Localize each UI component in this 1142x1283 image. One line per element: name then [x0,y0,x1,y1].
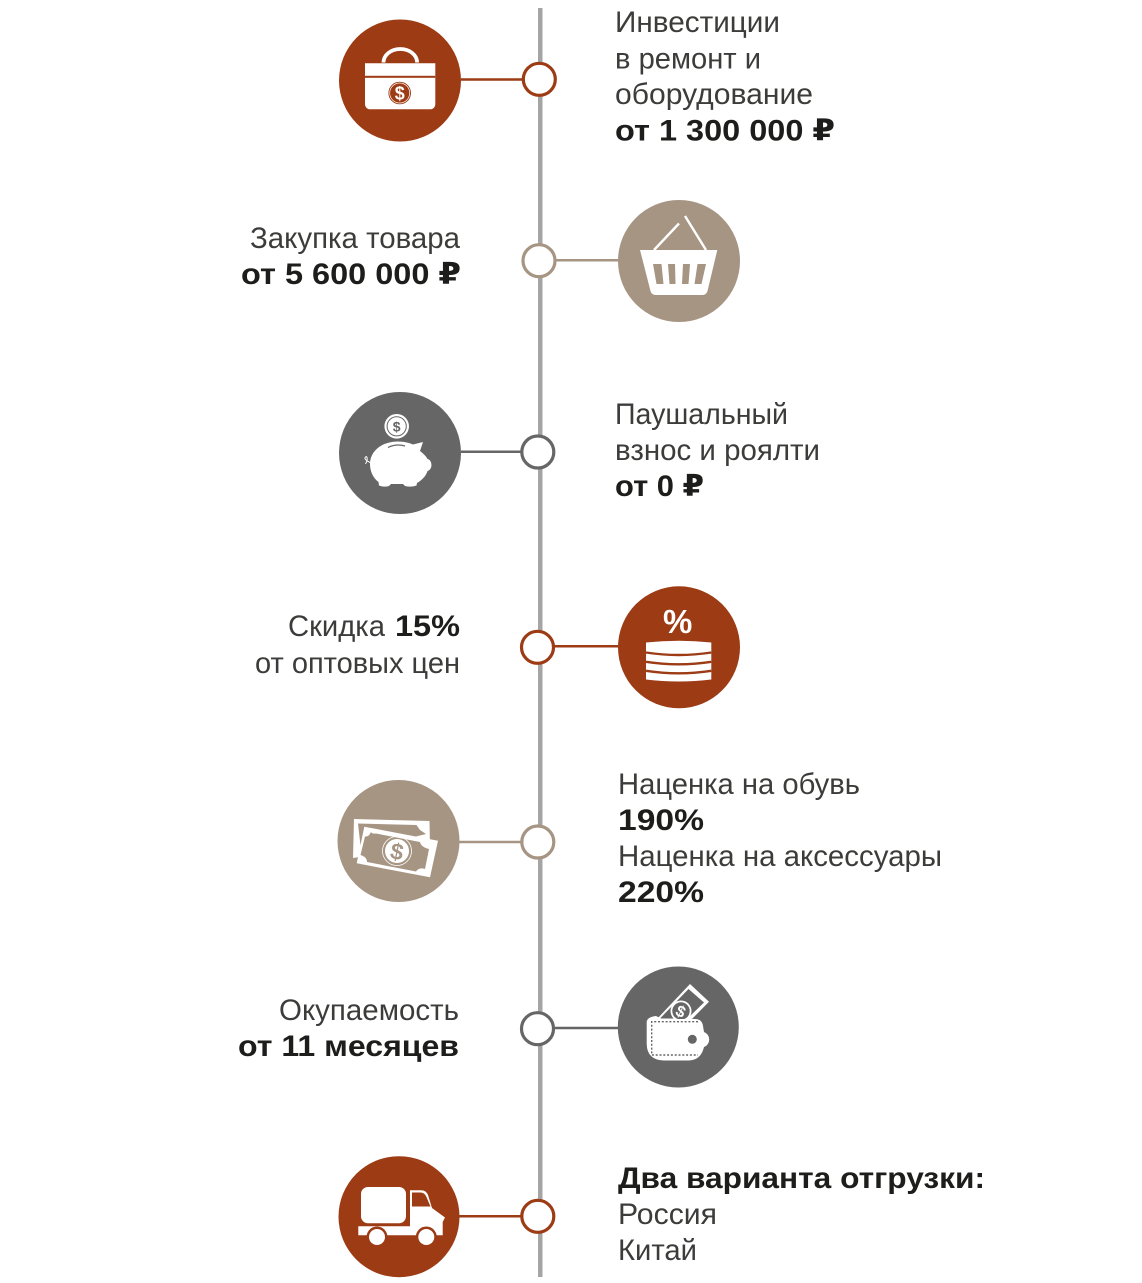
text: wholesale discount: от оптовых цен [255,647,460,680]
text: markup: Наценка на аксессуары [618,840,942,873]
connector and node 2 [523,245,618,277]
vertical timeline axis [538,8,542,1277]
text: shipping options: Два варианта отгрузки: [618,1162,985,1195]
text: shipping options: Китай [618,1234,697,1267]
step 6: payback [238,966,739,1088]
text: markup: 190% [618,804,704,837]
text: payback: Окупаемость [279,994,459,1027]
text: franchise fee and royalty [615,398,820,503]
step 3: franchise fee and royalty [339,392,820,514]
text: franchise fee and royalty: от 0 ₽ [615,470,704,503]
icon: wallet with banknote [618,966,739,1088]
icon: toolcase with dollar: $ [395,84,405,104]
icon: piggy bank with coin: $ [393,418,401,434]
connector and node 1 [461,63,555,95]
icon: toolcase with dollar [339,20,461,142]
text: franchise fee and royalty: Паушальный [615,398,788,431]
step 4: wholesale discount [255,586,740,708]
text: payback: от 11 месяцев [238,1030,459,1063]
text: franchise fee and royalty: взнос и роялти [615,434,820,467]
icon: delivery truck [338,1156,460,1277]
connector and node 5 [459,826,554,858]
text: payback [238,994,459,1063]
text: renovation and equipment [615,6,835,148]
text: renovation and equipment: оборудование [615,78,813,111]
text: wholesale discount: 15% [395,610,460,643]
text: wholesale discount: Скидка [288,610,385,643]
step 5: markup [338,768,942,909]
text: wholesale discount [255,610,460,680]
icon: banknotes: $ [388,838,406,866]
text: shipping options [618,1162,985,1267]
icon: wallet with banknote: $ [673,1003,688,1022]
text: markup: 220% [618,876,704,909]
connector and node 3 [461,436,554,468]
connector and node 6 [522,1013,618,1045]
text: goods purchase: Закупка товара [250,222,460,255]
step 1: renovation and equipment [339,6,835,148]
connector and node 4 [522,631,618,663]
text: goods purchase: от 5 600 000 ₽ [241,258,461,291]
icon: shopping basket [618,200,740,322]
icon: banknotes [338,780,460,902]
connector and node 7 [459,1200,554,1232]
text: markup: Наценка на обувь [618,768,860,801]
text: renovation and equipment: Инвестиции [615,6,780,39]
step 2: goods purchase [241,200,740,322]
text: goods purchase [241,222,461,291]
text: renovation and equipment: от 1 300 000 ₽ [615,114,835,148]
text: markup [618,768,942,909]
icon: piggy bank with coin [339,392,461,514]
icon: coin stack with percent: % [663,603,692,640]
icon: coin stack with percent [618,586,740,708]
step 7: shipping options [338,1156,985,1277]
text: renovation and equipment: в ремонт и [615,42,761,76]
text: shipping options: Россия [618,1198,717,1231]
